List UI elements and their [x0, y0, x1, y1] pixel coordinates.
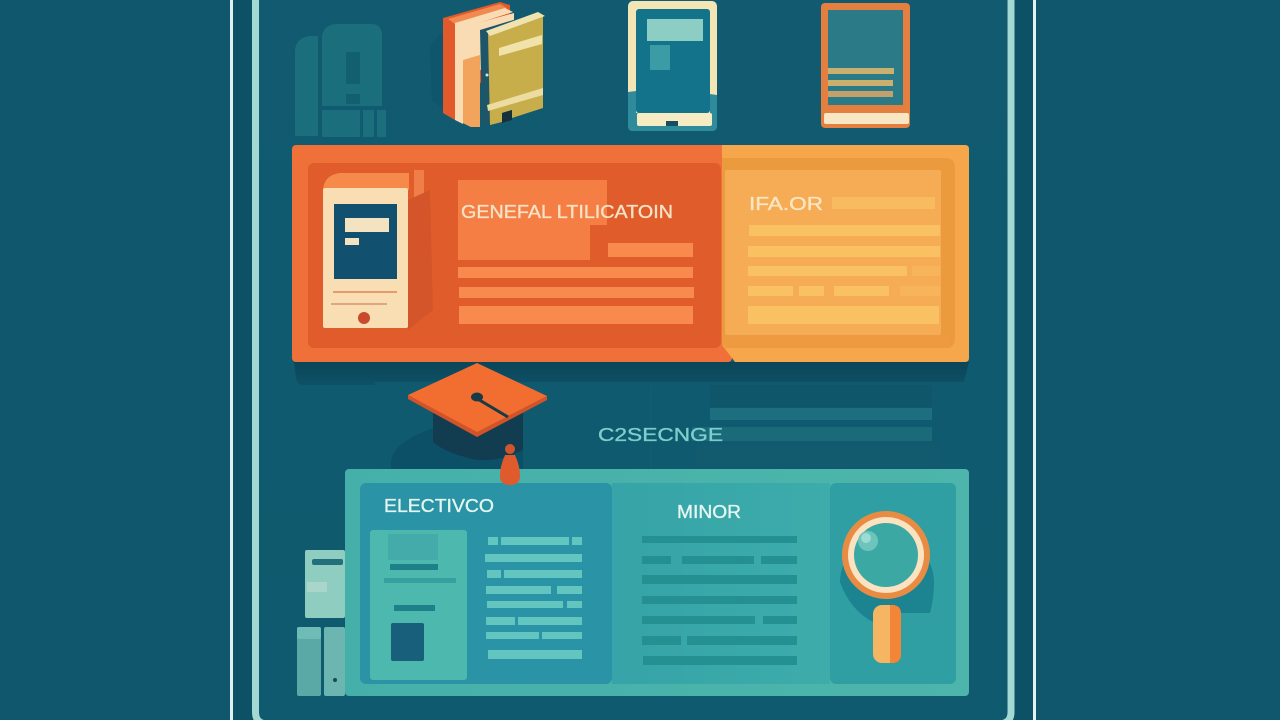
heading: minor: MINOR — [677, 502, 741, 522]
panel: general education — [292, 145, 732, 362]
icon: tablet — [628, 1, 717, 131]
card — [370, 530, 467, 680]
section label: C2SECNGE — [598, 425, 723, 445]
icon: device — [323, 170, 433, 330]
icon: side books — [297, 627, 345, 696]
icon: book with lines — [821, 3, 910, 128]
heading: GENEFAL LTILICATOIN — [461, 202, 673, 222]
icon: ghost building — [295, 24, 386, 137]
icon: magnifying glass — [840, 511, 934, 663]
text lines: electives — [485, 537, 582, 659]
panel: electives and minor — [345, 469, 969, 696]
heading: electives: ELECTIVCO — [384, 496, 494, 516]
icon: graduation cap — [391, 363, 547, 485]
panel: major — [722, 145, 969, 362]
icon: side card — [305, 550, 345, 618]
frame — [230, 0, 1036, 720]
text lines — [748, 197, 940, 324]
icon: stack of books — [430, 2, 545, 127]
ghost section strip — [375, 382, 969, 470]
heading: IFA.OR — [749, 194, 823, 214]
panel shadow — [294, 362, 969, 385]
text block — [458, 180, 607, 260]
text lines: minor — [642, 536, 797, 665]
